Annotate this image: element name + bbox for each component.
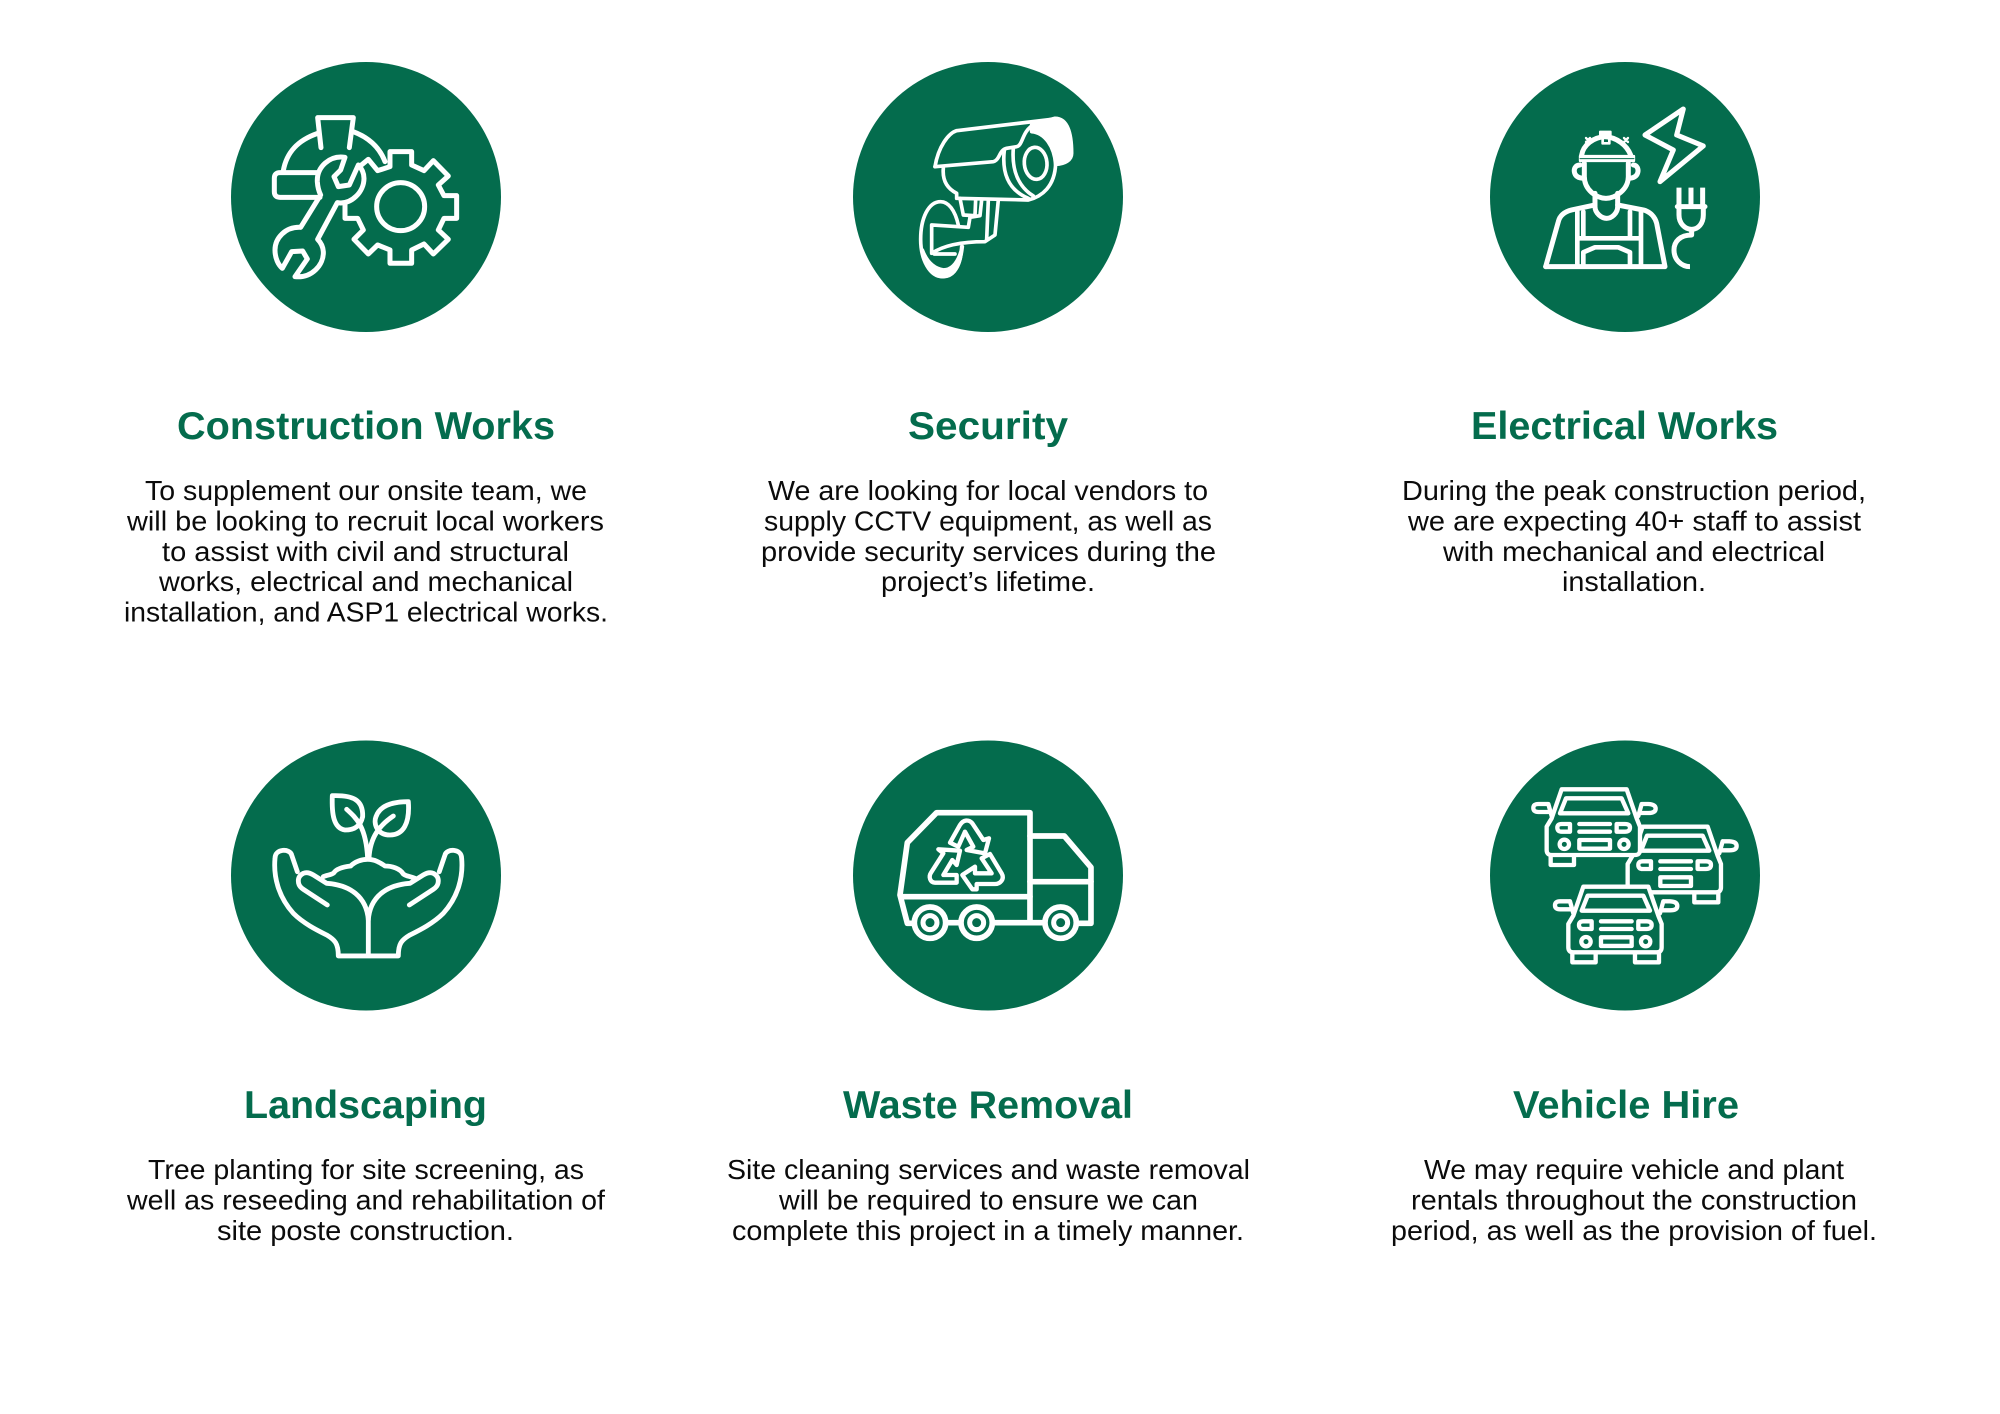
body text bbox=[1402, 475, 1866, 597]
body text: well as reseeding and rehabilitation of bbox=[126, 1184, 605, 1216]
body text: installation. bbox=[1562, 566, 1706, 597]
body text: to assist with civil and structural bbox=[162, 536, 569, 567]
body text: period, as well as the provision of fuel. bbox=[1391, 1215, 1877, 1246]
body text: supply CCTV equipment, as well as bbox=[764, 506, 1212, 536]
heading: Security bbox=[908, 405, 1068, 448]
heading: Vehicle Hire bbox=[1513, 1084, 1739, 1127]
icon: hard hat, wrench and gear bbox=[231, 62, 501, 332]
icon: hands holding a seedling bbox=[231, 740, 501, 1010]
body text: complete this project in a timely manner. bbox=[732, 1215, 1244, 1246]
body text: rentals throughout the construction bbox=[1411, 1184, 1857, 1216]
body text: Site cleaning services and waste removal bbox=[727, 1154, 1250, 1185]
body text: provide security services during the bbox=[761, 536, 1216, 567]
body text bbox=[727, 1154, 1250, 1246]
heading: Waste Removal bbox=[843, 1084, 1133, 1127]
body text bbox=[124, 475, 608, 628]
body text: Tree planting for site screening, as bbox=[148, 1154, 584, 1185]
body text: works, electrical and mechanical bbox=[158, 566, 573, 597]
heading: Construction Works bbox=[177, 405, 555, 448]
body text: we are expecting 40+ staff to assist bbox=[1407, 506, 1861, 536]
body text: will be looking to recruit local workers bbox=[126, 506, 604, 536]
body text: We are looking for local vendors to bbox=[768, 475, 1208, 506]
body text bbox=[126, 1154, 605, 1246]
body text: project’s lifetime. bbox=[881, 566, 1095, 597]
panel: security bbox=[761, 62, 1216, 597]
icon: cctv camera bbox=[853, 62, 1123, 332]
heading: Electrical Works bbox=[1471, 405, 1778, 448]
body text: installation, and ASP1 electrical works. bbox=[124, 596, 608, 628]
body text bbox=[1391, 1154, 1877, 1246]
body text: with mechanical and electrical bbox=[1442, 536, 1825, 567]
body text: will be required to ensure we can bbox=[778, 1184, 1198, 1216]
panel: waste removal bbox=[727, 740, 1250, 1246]
icon: three cars bbox=[1490, 740, 1760, 1010]
panel: landscaping bbox=[126, 740, 605, 1246]
panel: electrical works bbox=[1402, 62, 1866, 597]
body text bbox=[761, 475, 1216, 597]
icon: electrician, lightning bolt and plug bbox=[1490, 62, 1760, 332]
heading: Landscaping bbox=[244, 1084, 487, 1127]
panel: vehicle hire bbox=[1391, 740, 1877, 1246]
body text: site poste construction. bbox=[217, 1215, 514, 1246]
icon: recycling truck bbox=[853, 740, 1123, 1010]
body text: We may require vehicle and plant bbox=[1424, 1154, 1844, 1185]
body text: During the peak construction period, bbox=[1402, 475, 1866, 506]
body text: To supplement our onsite team, we bbox=[145, 475, 587, 506]
panel: construction works bbox=[124, 62, 608, 628]
